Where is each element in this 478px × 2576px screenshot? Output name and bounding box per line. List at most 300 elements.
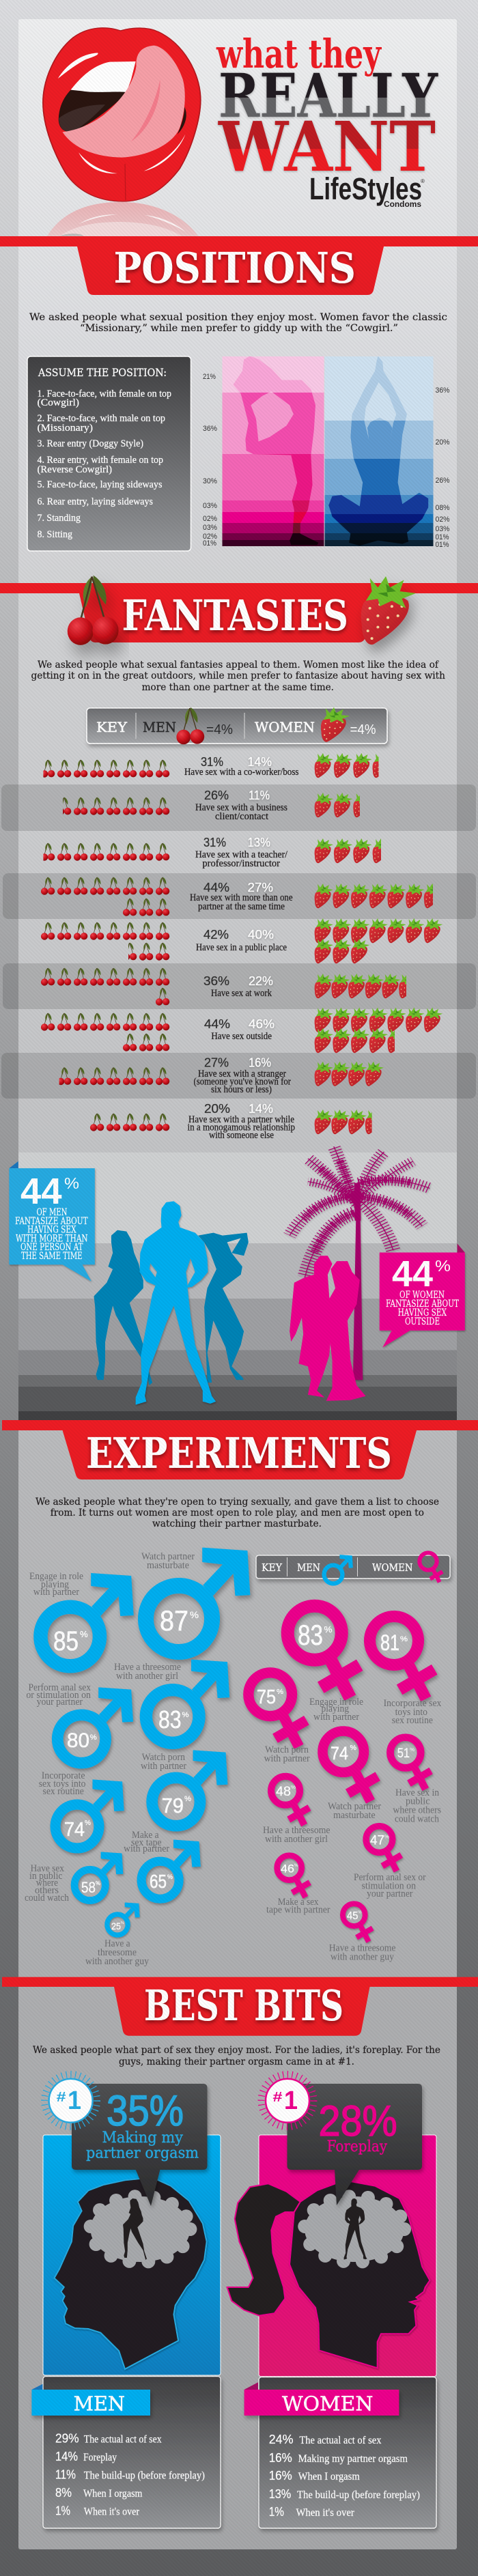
male symbol 74%: [55, 1779, 124, 1848]
panel: men list: 29%: [55, 2432, 79, 2446]
men experiment labels: sex tape: [131, 1837, 162, 1848]
panel: assume the position list: 4. Rear entry, with female on top: [37, 455, 163, 466]
men experiment labels: Have a threesome: [114, 1662, 181, 1673]
row: monogamous: 20%: [204, 1102, 230, 1116]
speech bubble: women 28%: [287, 2084, 422, 2205]
women experiment labels: with partner: [264, 1753, 310, 1764]
women experiment labels: Have a threesome: [329, 1943, 396, 1954]
panel: men list: 1%: [55, 2504, 70, 2518]
men experiment labels: or stimulation on: [26, 1690, 92, 1701]
female symbol 83%: [287, 1606, 360, 1698]
women experiments: [249, 1606, 434, 1942]
male symbol 80%: %: [90, 1733, 97, 1742]
female symbol 51%: [390, 1738, 431, 1789]
female symbol 83%: %: [324, 1624, 333, 1634]
panel: women list: 13%: [269, 2487, 291, 2501]
men experiment labels: could watch: [25, 1893, 70, 1903]
panel: women list: When it's over: [296, 2507, 354, 2519]
female symbol 45%: 45: [347, 1910, 358, 1922]
badge: women #1: #: [273, 2090, 283, 2105]
men percent labels: 03%: [436, 525, 450, 533]
male symbol 74%: 74: [64, 1819, 85, 1841]
speech bubble: men 35%: partner orgasm: [86, 2145, 199, 2162]
best bits intro text: [33, 2045, 440, 2067]
best bits intro text: We asked people what part of sex they enjoy most. For the ladies, it's foreplay. For the: [33, 2045, 440, 2056]
panel: assume the position list: (Cowgirl): [37, 397, 79, 408]
positions intro text: “Missionary,” while men prefer to giddy up with the “Cowgirl.”: [80, 323, 398, 334]
row: outside: Have sex outside: [211, 1031, 272, 1042]
row: teacher: 13%: [247, 836, 270, 849]
row: monogamous: [90, 1102, 384, 1141]
women strawberries 13%: [315, 838, 391, 863]
women experiment labels: Incorporate sex: [384, 1698, 442, 1709]
callout: 44% of men: FANTASIZE ABOUT: [15, 1216, 88, 1227]
men experiment labels: where: [36, 1878, 58, 1888]
speech bubble: men 35%: [72, 2084, 208, 2206]
women experiment labels: masturbate: [333, 1810, 376, 1821]
women experiment labels: [263, 1697, 442, 1963]
women experiment labels: Have sex in: [395, 1787, 440, 1798]
row: monogamous: 14%: [249, 1102, 273, 1116]
icon: large cherries: [68, 576, 119, 645]
callout: 44% of men: OF MEN: [37, 1207, 68, 1218]
row: at work: 22%: [249, 974, 273, 988]
lip highlights: [58, 53, 185, 173]
experiments intro text: [36, 1497, 439, 1529]
male symbol 79%: %: [184, 1795, 191, 1803]
male symbol 85%: 85: [53, 1626, 79, 1656]
banner: fantasies: [0, 576, 478, 645]
silhouette: dancer: [234, 356, 318, 545]
callout: 44% of women: FANTASIZE ABOUT: [386, 1299, 459, 1310]
female symbol 46%: [277, 1856, 310, 1897]
row: public place: [41, 918, 442, 963]
men percent labels: 26%: [436, 477, 450, 485]
icon: key strawberry: [321, 707, 350, 742]
banner: experiments: [2, 1420, 478, 1480]
female symbol 81%: %: [400, 1635, 408, 1643]
women experiment labels: Watch porn: [265, 1744, 309, 1755]
panel: women list: Making my partner orgasm: [298, 2453, 408, 2465]
head silhouette: [54, 2177, 207, 2369]
callout: 44% of men: ONE PERSON AT: [20, 1242, 83, 1253]
row: business client: [57, 789, 372, 822]
mouth interior: [59, 90, 128, 132]
women strawberries 22%: [315, 974, 418, 998]
female symbol 81%: [370, 1617, 434, 1699]
callout: 44% of men: THE SAME TIME: [21, 1251, 82, 1262]
women experiment labels: sex routine: [392, 1715, 433, 1726]
men experiment labels: with another guy: [85, 1956, 150, 1967]
tongue crease: [131, 80, 160, 141]
female symbol 48%: 48: [276, 1785, 291, 1799]
illustration: palm tree: [290, 1146, 430, 1380]
women experiment labels: with another guy: [331, 1952, 395, 1963]
row: more than one partner: Have sex with more than one: [190, 892, 293, 903]
ponytail: [227, 2183, 300, 2316]
male symbol 25%: 25: [111, 1921, 121, 1931]
women strawberries 27%: [315, 883, 442, 908]
panel: men list: 8%: [55, 2486, 72, 2500]
panel: assume the position list: 2. Face-to-face, with male on top: [37, 413, 165, 424]
panel: assume the position list: 8. Sitting: [37, 529, 72, 540]
panel: women list: 16%: [269, 2451, 292, 2465]
women experiment labels: Perform anal sex or: [354, 1872, 426, 1883]
fantasies key: KEY: [96, 719, 128, 735]
women experiment labels: Engage in role: [309, 1697, 363, 1708]
fantasies intro text: [31, 660, 445, 693]
row: teacher: 31%: [203, 836, 226, 849]
male symbol 65%: [141, 1840, 201, 1899]
fantasies key: =4%: [350, 722, 376, 737]
panel: women list: The actual act of sex: [299, 2435, 381, 2446]
experiments intro text: from. It turns out women are most open to role play, and men are most open to: [51, 1508, 424, 1518]
female symbol 51%: %: [410, 1746, 414, 1753]
men percent labels: 36%: [436, 386, 450, 395]
callout: 44% of men: [9, 1161, 95, 1282]
female symbol 83%: 83: [298, 1619, 323, 1651]
banner: experiments: EXPERIMENTS: [86, 1428, 392, 1478]
row: stranger: [57, 1056, 384, 1095]
women strawberries 16%: [315, 1062, 384, 1086]
man centre: [136, 1201, 216, 1404]
row: more than one partner: partner at the same time: [198, 901, 285, 912]
women experiment labels: your partner: [367, 1888, 413, 1899]
speech bubble: women 28%: 28%: [318, 2097, 397, 2145]
badge: men #1: #: [57, 2090, 66, 2105]
woman left: [94, 1230, 152, 1385]
row: co-worker/boss: 14%: [247, 755, 272, 769]
panel: women list: 16%: [269, 2469, 292, 2482]
banner: fantasies: FANTASIES: [122, 591, 348, 640]
men experiment labels: masturbate: [147, 1560, 189, 1571]
women percent labels: 03%: [203, 502, 217, 510]
mouth illustration: [43, 28, 201, 236]
women experiment labels: public: [406, 1796, 430, 1807]
lips: [43, 28, 201, 201]
banner: best bits: [2, 1977, 478, 2036]
callout: 44% of women: OF WOMEN: [399, 1290, 445, 1301]
male symbol 87%: 87: [160, 1604, 188, 1637]
row: stranger: (someone you've known for: [194, 1076, 291, 1087]
men experiment labels: your partner: [37, 1697, 83, 1708]
panel: assume the position list: (Reverse Cowgirl): [37, 464, 112, 475]
male symbol 74%: %: [85, 1820, 91, 1827]
women strawberries 46%: [315, 1008, 442, 1053]
women experiment labels: with partner: [313, 1712, 359, 1723]
head silhouette: [290, 2181, 430, 2368]
men experiment labels: Engage in role: [29, 1571, 83, 1582]
female symbol 47%: %: [384, 1834, 389, 1840]
female symbol 45%: [343, 1903, 373, 1942]
fantasies intro text: getting it on in the great outdoors, while men prefer to fantasize about having sex with: [31, 670, 445, 681]
row: public place: 42%: [203, 928, 229, 942]
male symbol 65%: 65: [150, 1871, 167, 1892]
men experiment labels: in public: [29, 1871, 63, 1882]
men experiment labels: with partner: [124, 1843, 169, 1854]
men cherries 42%: [41, 922, 169, 961]
lower mouth shade: [59, 104, 105, 132]
banner: best bits: BEST BITS: [144, 1981, 343, 2030]
striped rows: [1, 784, 476, 1099]
callout: 44% of women: %: [435, 1257, 451, 1275]
silhouettes: couple in pink: [290, 1256, 366, 1401]
male symbol 83%: [146, 1660, 229, 1743]
men cherries 20%: [90, 1113, 169, 1131]
panel: assume the position list: 5. Face-to-face, laying sideways: [37, 479, 163, 490]
women percent labels: [203, 373, 217, 548]
fantasies key: =4%: [206, 722, 233, 737]
panel: assume the position list: 7. Standing: [37, 513, 81, 524]
mouth reflection: [47, 202, 198, 236]
panel: assume the position list: 3. Rear entry (Doggy Style): [37, 438, 143, 449]
female symbol 51%: 51: [397, 1746, 410, 1761]
panel: men list: The actual act of sex: [84, 2434, 162, 2446]
panel: men head: [43, 2135, 221, 2375]
women percent labels: 30%: [203, 477, 217, 485]
speech bubble: men 35%: Making my: [102, 2129, 184, 2147]
female symbol 81%: 81: [380, 1630, 399, 1655]
panel: assume the position list: 1. Face-to-face, with female on top: [37, 388, 171, 399]
row: teacher: Have sex with a teacher/: [195, 849, 288, 860]
men cherries 36%: [41, 968, 169, 1006]
icon: female key: [419, 1553, 442, 1582]
callout: 44% of men: %: [64, 1174, 79, 1192]
panel: men list: [31, 2377, 221, 2528]
men percent labels: 01%: [436, 533, 449, 541]
panel: men list: 14%: [55, 2450, 78, 2463]
row: teacher: [41, 836, 391, 869]
panel: women list: The build-up (before foreplay): [297, 2489, 420, 2501]
panel: women list: 1%: [269, 2505, 284, 2519]
ribbon: women: [244, 2382, 399, 2416]
row: at work: [41, 968, 417, 1006]
speech bubble: men 35%: 35%: [107, 2087, 184, 2135]
panel: men list: When it's over: [84, 2506, 140, 2518]
panel: women list: [244, 2377, 436, 2528]
chart: women positions stacked bar: [223, 356, 324, 546]
male symbol 58%: %: [96, 1880, 100, 1886]
male symbol 80%: [57, 1687, 133, 1763]
men percent labels: 02%: [436, 515, 450, 524]
men percent labels: 08%: [436, 504, 450, 512]
women experiment labels: Make a sex: [278, 1897, 319, 1908]
men cherries 44%: [41, 1013, 169, 1051]
callout: 44% of women: HAVING SEX: [398, 1307, 447, 1318]
row: monogamous: Have sex with a partner while: [188, 1114, 294, 1125]
callout: 44% of women: OUTSIDE: [405, 1316, 440, 1327]
women strawberries 11%: [315, 793, 372, 817]
title line: what they: what they: [216, 31, 382, 77]
row: at work: Have sex at work: [211, 988, 272, 999]
row: business client: 11%: [249, 789, 270, 802]
women experiment labels: could watch: [395, 1814, 440, 1825]
lip crease: [124, 164, 126, 200]
men experiment labels: with partner: [141, 1761, 186, 1772]
experiments key: [256, 1553, 450, 1583]
female symbol 74%: %: [350, 1744, 356, 1752]
row: outside: 44%: [204, 1017, 230, 1031]
row: stranger: Have sex with a stranger: [198, 1068, 286, 1079]
experiments key: KEY: [262, 1561, 283, 1574]
badge: women #1: [261, 2074, 314, 2127]
female symbol 47%: 47: [370, 1834, 384, 1848]
women experiment labels: Watch partner: [328, 1801, 381, 1812]
title line: REALLY: REALLY: [219, 60, 438, 131]
ribbon: women: WOMEN: [282, 2392, 373, 2416]
female symbol 74%: [322, 1731, 378, 1801]
brain thought shape: [90, 2196, 190, 2262]
experiments key: MEN: [297, 1561, 320, 1574]
women experiment labels: where others: [393, 1805, 441, 1816]
female symbol 48%: %: [291, 1784, 296, 1790]
title line: WANT: WANT: [218, 107, 436, 187]
silhouette: meditating man: [325, 356, 433, 546]
experiments intro text: We asked people what they're open to trying sexually, and gave them a list to choose: [36, 1497, 439, 1508]
women strawberries 40%: [315, 918, 442, 963]
male symbol 85%: [40, 1573, 134, 1666]
badge: men #1: [44, 2074, 97, 2127]
panel: men list: The build-up (before foreplay): [84, 2470, 205, 2482]
row: monogamous: in a monogamous relationship: [187, 1122, 295, 1133]
men experiment labels: [25, 1551, 195, 1967]
men experiment labels: with another girl: [116, 1671, 178, 1682]
male symbol 80%: 80: [67, 1729, 89, 1752]
row: business client: client/contact: [215, 811, 268, 822]
female symbol 74%: 74: [331, 1743, 348, 1764]
men experiment labels: sex routine: [42, 1786, 84, 1797]
fantasies intro text: more than one partner at the same time.: [142, 682, 334, 693]
male symbol 83%: 83: [158, 1705, 182, 1733]
men experiment labels: sex toys into: [39, 1779, 85, 1789]
men experiments: [40, 1548, 250, 1935]
experiments intro text: watching their partner masturbate.: [152, 1518, 322, 1529]
teeth: [71, 61, 136, 92]
women percent labels: 03%: [203, 524, 217, 532]
row: stranger: 16%: [249, 1056, 271, 1069]
men experiment labels: others: [35, 1885, 59, 1896]
male symbol 79%: [152, 1750, 227, 1826]
icon: large strawberry: [361, 576, 416, 645]
women experiment labels: tape with partner: [266, 1905, 331, 1916]
row: more than one partner: 27%: [247, 881, 273, 894]
row: co-worker/boss: Have sex with a co-worker/boss: [184, 767, 299, 778]
panel: men list: 11%: [55, 2468, 76, 2482]
tongue: [63, 46, 185, 158]
men percent labels: 20%: [436, 438, 450, 447]
dark corner: [178, 107, 186, 135]
women experiment labels: with another girl: [265, 1834, 328, 1845]
row: public place: 40%: [248, 928, 274, 942]
ribbon: men: MEN: [74, 2392, 125, 2416]
women percent labels: 21%: [203, 373, 216, 381]
female symbol 75%: [249, 1673, 307, 1746]
banner: positions: POSITIONS: [113, 243, 356, 293]
women experiment labels: toys into: [395, 1707, 427, 1718]
men experiment labels: threesome: [98, 1947, 137, 1958]
men cherries 26%: [57, 797, 169, 815]
men experiment labels: with partner: [33, 1587, 79, 1598]
icon: key cherry: [176, 707, 204, 744]
row: public place: Have sex in a public place: [196, 942, 287, 953]
male symbol 58%: 58: [81, 1879, 96, 1896]
logo: LifeStyles Condoms: LifeStyles: [309, 171, 422, 206]
row: more than one partner: 44%: [203, 881, 229, 894]
experiments key: WOMEN: [372, 1561, 412, 1574]
female symbol 75%: 75: [257, 1686, 276, 1708]
banner: positions: [0, 236, 478, 295]
men experiment labels: Perform anal sex: [29, 1682, 92, 1693]
male symbol 87%: %: [190, 1609, 199, 1620]
silhouettes: man and two women in blue: [94, 1201, 249, 1404]
fantasies key: WOMEN: [255, 719, 315, 735]
women experiment labels: Have a threesome: [263, 1825, 331, 1836]
male symbol 58%: [74, 1852, 123, 1901]
men cherries 31%: [41, 759, 169, 778]
positions intro text: [29, 312, 447, 334]
row: stranger: 27%: [204, 1056, 229, 1069]
brain thought shape: [305, 2196, 404, 2262]
callout: 44% of men: WITH MORE THAN: [16, 1234, 88, 1245]
row: at work: 36%: [203, 974, 229, 988]
row: co-worker/boss: [41, 753, 391, 778]
women experiment labels: stimulation on: [362, 1881, 417, 1892]
speech bubble: women 28%: Foreplay: [327, 2138, 388, 2155]
men experiment labels: Make a: [132, 1830, 159, 1841]
badge: women #1: 1: [284, 2086, 298, 2115]
woman in mind: [123, 2198, 147, 2260]
positions intro text: We asked people what sexual position they enjoy most. Women favor the classic: [29, 312, 447, 323]
ribbon: men: [31, 2384, 150, 2416]
men percent labels: 01%: [436, 541, 449, 549]
row: co-worker/boss: 31%: [201, 755, 223, 769]
scene: stepped background: [18, 1152, 457, 1420]
women percent labels: 02%: [203, 515, 217, 523]
man in mind: [344, 2198, 367, 2260]
panel: men list: When I orgasm: [83, 2488, 143, 2500]
fantasies key: [87, 707, 387, 744]
panel: assume the position list: [27, 356, 191, 551]
palm trunk: [353, 1215, 363, 1380]
panel: women list: When I orgasm: [298, 2471, 360, 2482]
women strawberries 14%: [315, 1109, 384, 1134]
men experiment labels: Incorporate: [42, 1770, 85, 1781]
female symbol 75%: %: [277, 1688, 283, 1696]
women strawberries 14%: [315, 753, 391, 778]
male symbol 83%: %: [182, 1711, 189, 1719]
panel: women head: [227, 2135, 436, 2377]
woman right: [198, 1233, 249, 1383]
men cherries 31%: [41, 843, 169, 861]
callout: 44% of women: 44: [392, 1254, 433, 1294]
female symbol 47%: [366, 1826, 402, 1871]
chart: men positions stacked bar: [325, 356, 433, 546]
female symbol 45%: %: [358, 1911, 362, 1915]
row: teacher: professor/instructor: [202, 858, 280, 869]
male symbol 79%: 79: [162, 1794, 184, 1817]
female symbol 48%: [271, 1777, 309, 1825]
callout: 44% of men: HAVING SEX: [27, 1225, 76, 1236]
logo: LifeStyles Condoms: ®: [421, 178, 425, 184]
panel: men list: Foreplay: [83, 2452, 117, 2463]
male symbol 85%: %: [80, 1629, 88, 1639]
callout: 44% of women: [380, 1243, 465, 1348]
men cherries 44%: [41, 877, 169, 916]
panel: assume the position list: (Missionary): [37, 423, 93, 434]
icon: male key: [324, 1555, 353, 1583]
women percent labels: 01%: [203, 539, 216, 548]
row: stranger: six hours or less): [211, 1084, 272, 1095]
